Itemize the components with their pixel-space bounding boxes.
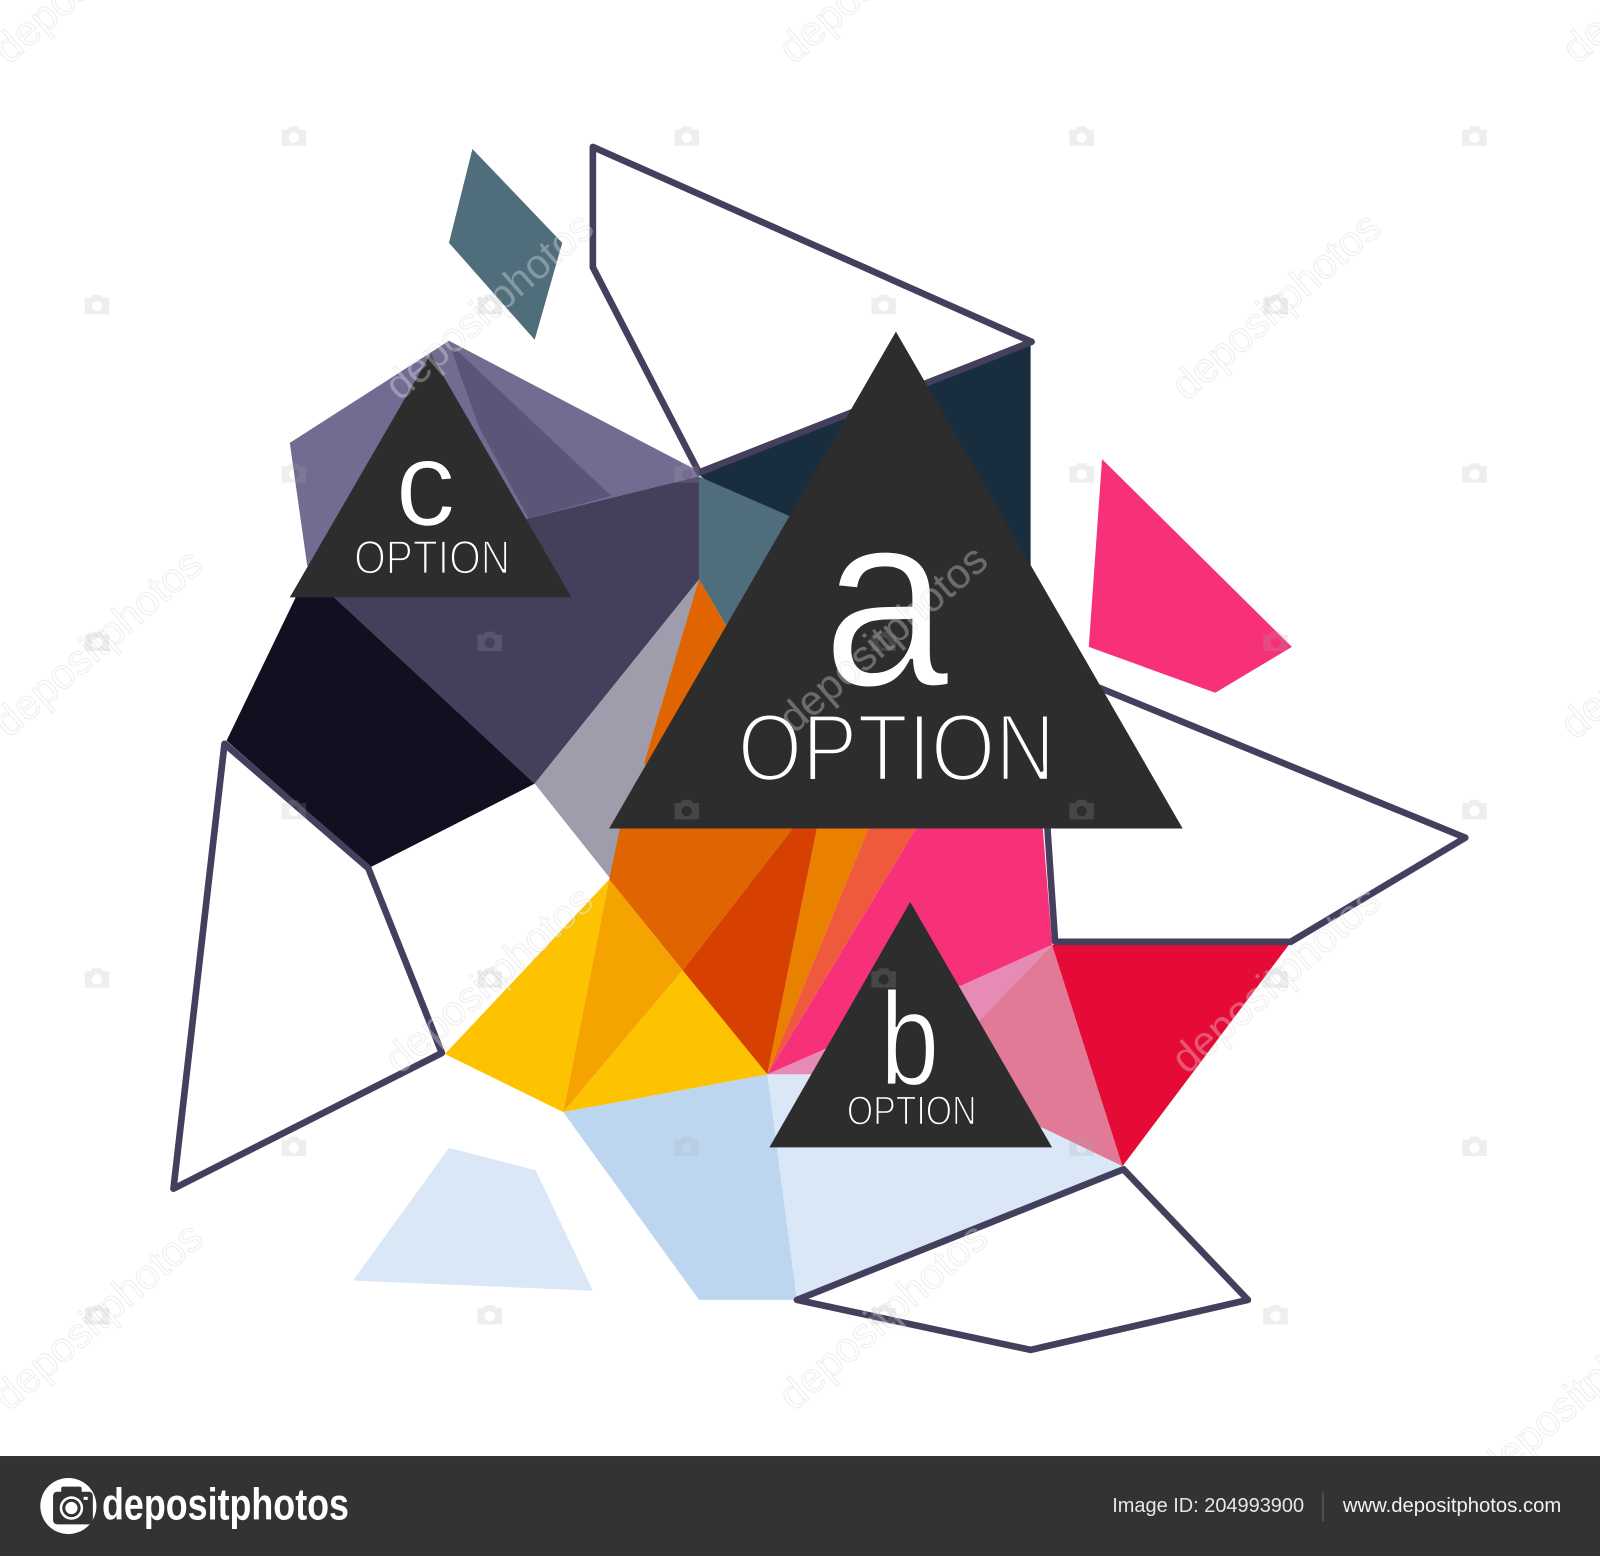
footer bar <box>0 1456 1600 1556</box>
outline: top polygon <box>593 147 1032 472</box>
watermark layer: depositphotos <box>375 203 602 409</box>
outline: bottom polygon <box>797 1169 1248 1350</box>
callout: option b: OPTION <box>847 1087 977 1133</box>
watermark layer: depositphotos <box>769 535 996 741</box>
callout: option a <box>609 332 1183 829</box>
panel: pink floating shape <box>1089 459 1292 693</box>
footer divider <box>1322 1492 1323 1521</box>
callout: option c <box>290 354 571 597</box>
watermark layer: depositphotos <box>375 876 602 1082</box>
callout: option c: OPTION <box>354 531 510 583</box>
icon: depositphotos camera logo <box>40 1478 96 1534</box>
callout: option c: c <box>395 416 456 551</box>
callout: option a: OPTION <box>738 695 1055 802</box>
callout: option b <box>769 902 1052 1147</box>
panel: pink and red facets <box>767 816 1289 1166</box>
panel: teal diamond <box>449 149 562 340</box>
watermark layer: depositphotos <box>1162 876 1389 1082</box>
callout: option b: b <box>880 966 939 1114</box>
callout: option a: a <box>822 460 950 739</box>
panel: orange and yellow facets <box>445 816 923 1112</box>
watermark layer: depositphotos <box>1162 203 1389 409</box>
panel: purple facets <box>227 341 699 879</box>
outline: right polygon <box>1046 681 1465 942</box>
footer logo text: depositphotos <box>102 1478 349 1529</box>
panel: pale blue floating shape <box>353 1148 593 1291</box>
image id: Image ID: 204993900 <box>1112 1495 1304 1517</box>
watermark layer: depositphotos <box>769 1213 996 1419</box>
panel: navy and teal facets <box>644 344 1031 764</box>
panel: light blue facets <box>563 1074 1122 1300</box>
website url: www.depositphotos.com <box>1342 1495 1561 1517</box>
outline: left polygon <box>173 744 442 1189</box>
